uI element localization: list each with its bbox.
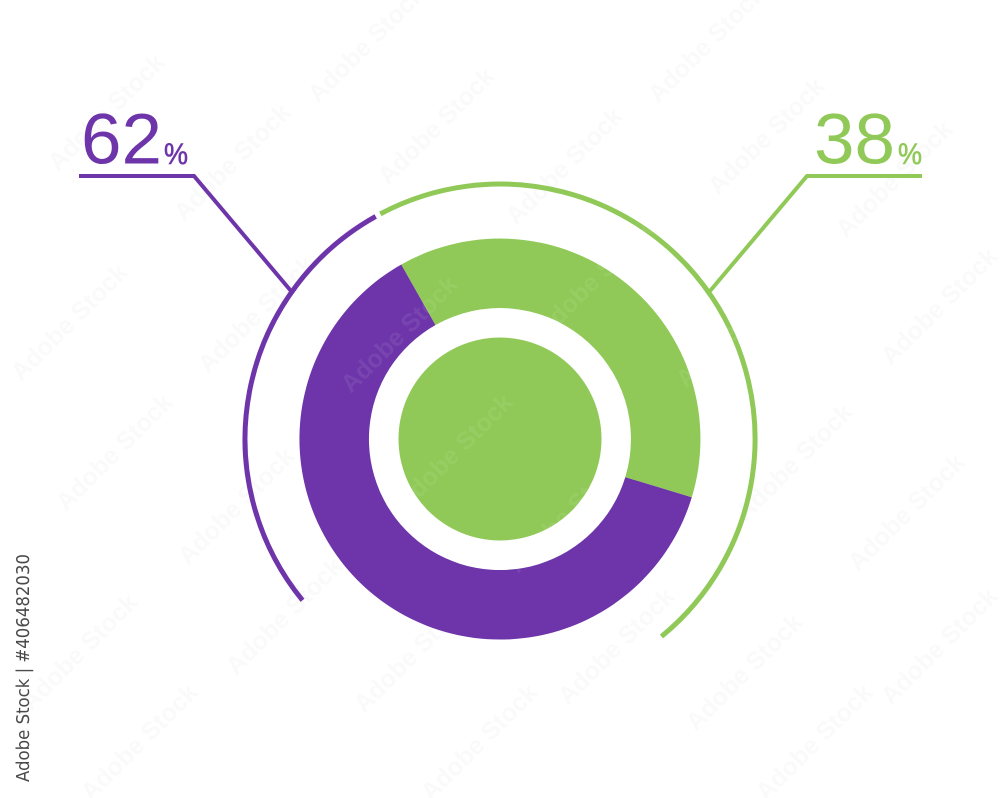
donut segment: green 38% bbox=[401, 239, 700, 497]
donut segment: purple 62% bbox=[299, 264, 692, 640]
donut chart bbox=[299, 239, 700, 640]
watermark pattern over chart: Adobe Stock bbox=[390, 388, 518, 516]
watermark pattern on background: Adobe Stock bbox=[875, 242, 1000, 370]
watermark pattern on background: Adobe Stock bbox=[830, 115, 958, 243]
watermark pattern on background: Adobe Stock bbox=[702, 72, 830, 200]
watermark pattern on background: Adobe Stock bbox=[192, 250, 320, 378]
label: 62%: 62 bbox=[81, 100, 162, 180]
leader line: purple bbox=[79, 176, 291, 291]
watermark pattern on background: Adobe Stock bbox=[552, 582, 680, 710]
label: 38%: 38 bbox=[814, 100, 895, 180]
watermark pattern on background: Adobe Stock bbox=[730, 398, 858, 526]
watermark pattern over chart bbox=[335, 215, 798, 578]
watermark pattern on background: Adobe Stock bbox=[372, 62, 500, 190]
watermark pattern over chart: Adobe Stock bbox=[670, 265, 798, 393]
stock id side text: Adobe Stock | #406482030 bbox=[13, 554, 34, 782]
label: 62%: % bbox=[164, 138, 188, 171]
watermark pattern on background: Adobe Stock bbox=[842, 448, 970, 576]
watermark pattern over chart: Adobe Stock bbox=[502, 450, 630, 578]
center circle bbox=[398, 338, 602, 540]
watermark pattern on background: Adobe Stock bbox=[5, 258, 133, 386]
watermark pattern on background: Adobe Stock bbox=[348, 590, 476, 718]
watermark pattern on background: Adobe Stock bbox=[15, 588, 143, 716]
watermark pattern on background: Adobe Stock bbox=[168, 98, 296, 226]
watermark pattern on background: Adobe Stock bbox=[680, 608, 808, 736]
watermark pattern over chart: Adobe Stock bbox=[530, 215, 658, 343]
watermark pattern on background: Adobe Stock bbox=[500, 102, 628, 230]
outer arc: purple bbox=[245, 216, 376, 600]
watermark pattern on background: Adobe Stock bbox=[42, 48, 170, 176]
watermark pattern on background: Adobe Stock bbox=[50, 388, 178, 516]
leader line: green bbox=[710, 176, 922, 291]
outer arc: green bbox=[380, 184, 755, 636]
watermark pattern on background: Adobe Stock bbox=[172, 442, 300, 570]
watermark pattern over chart: Adobe Stock bbox=[335, 270, 463, 398]
label: 38%: % bbox=[898, 138, 922, 171]
watermark pattern on background: Adobe Stock bbox=[220, 552, 348, 680]
watermark pattern on background: Adobe Stock bbox=[875, 582, 1000, 710]
